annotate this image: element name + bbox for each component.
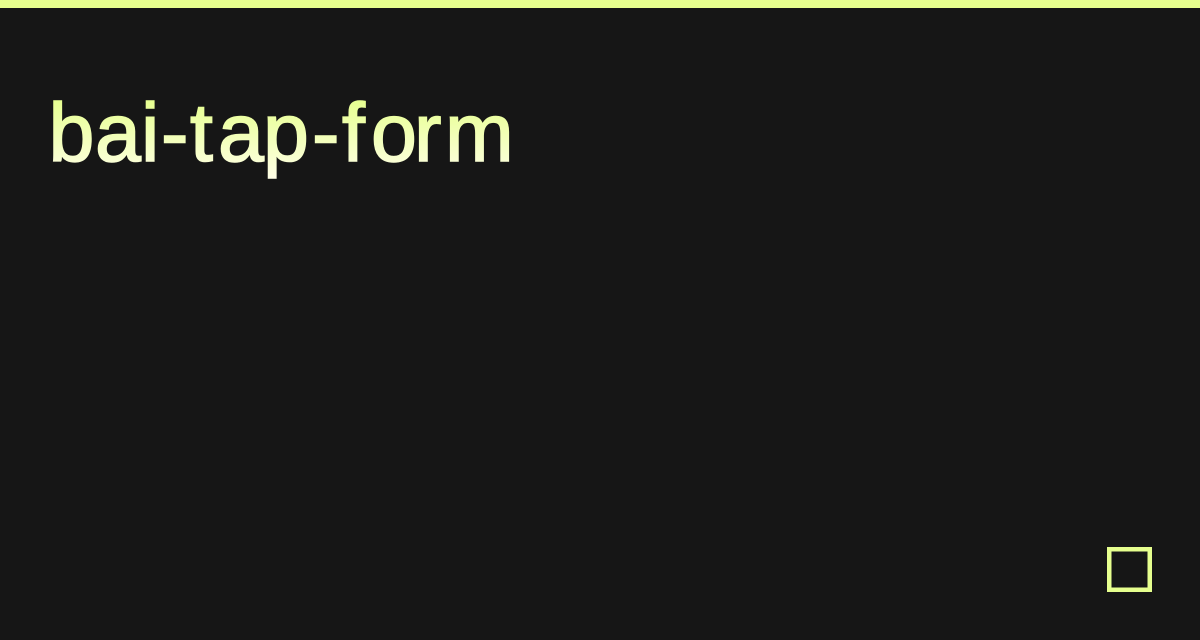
title: bai-tap-form [48,87,514,179]
icon: hollow square [1107,547,1152,592]
top accent bar [0,0,1200,8]
